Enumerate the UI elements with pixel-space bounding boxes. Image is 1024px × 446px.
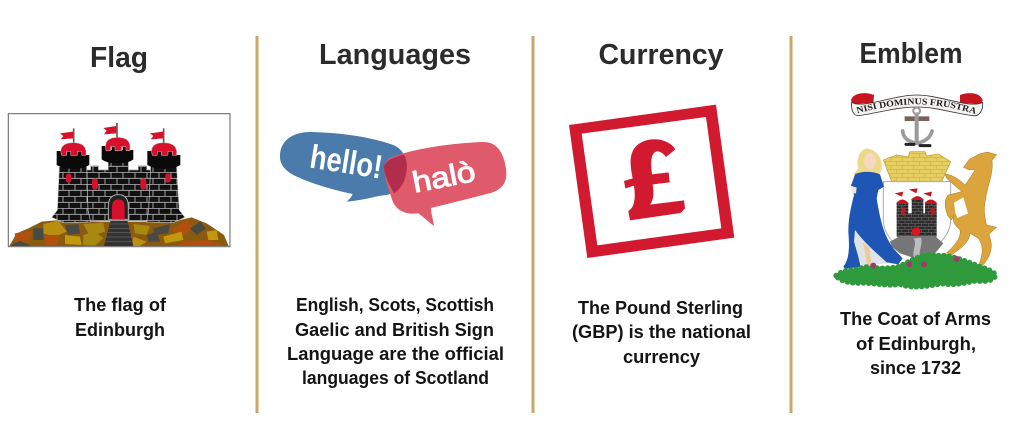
castle stairs bbox=[104, 220, 133, 246]
blue bubble: hello: hello! bbox=[307, 139, 385, 187]
heading: Flag: Flag bbox=[90, 42, 148, 74]
left tower bbox=[52, 167, 91, 223]
languages caption: Gaelic and British Sign bbox=[295, 319, 494, 340]
currency caption bbox=[572, 297, 751, 367]
rocky hill bbox=[9, 217, 229, 246]
flag caption bbox=[74, 294, 167, 340]
emblem caption: of Edinburgh, bbox=[856, 333, 976, 354]
red bubble: halo bbox=[384, 142, 506, 226]
divider: currency and emblem bbox=[790, 36, 792, 413]
coat of arms bbox=[833, 93, 998, 290]
emblem caption bbox=[840, 308, 991, 378]
panel: currency bbox=[569, 39, 751, 367]
heading: Emblem: Emblem bbox=[860, 38, 962, 70]
divider: flag and languages bbox=[256, 36, 258, 413]
currency caption: (GBP) is the national bbox=[572, 321, 751, 342]
grassy compartment bbox=[836, 255, 996, 287]
castle walls bbox=[86, 160, 151, 221]
heading: Languages: Languages bbox=[319, 39, 471, 71]
speech bubbles bbox=[280, 132, 506, 226]
flags bbox=[74, 123, 164, 143]
mural crown bbox=[883, 152, 951, 182]
currency caption: The Pound Sterling bbox=[578, 297, 743, 318]
panel: languages bbox=[280, 39, 506, 388]
anchor bbox=[903, 108, 932, 146]
emblem caption: The Coat of Arms bbox=[840, 308, 991, 329]
icon: pound sterling stamp bbox=[569, 105, 734, 258]
panel: flag bbox=[8, 42, 230, 340]
centre tower bbox=[102, 146, 133, 163]
languages caption: languages of Scotland bbox=[302, 367, 489, 388]
flag caption: Edinburgh bbox=[75, 319, 165, 340]
heading: Currency: Currency bbox=[598, 39, 724, 71]
shield bbox=[883, 182, 951, 260]
languages caption bbox=[287, 294, 504, 388]
flag of Edinburgh bbox=[8, 114, 230, 247]
panel: emblem bbox=[833, 38, 998, 378]
emblem caption: since 1732 bbox=[870, 357, 961, 378]
castle door bbox=[108, 195, 128, 219]
right tower bbox=[147, 167, 185, 223]
doe supporter bbox=[945, 152, 997, 271]
bubble overlap bbox=[384, 154, 407, 193]
maiden figure bbox=[843, 148, 903, 269]
pound glyph bbox=[624, 139, 685, 220]
languages caption: English, Scots, Scottish bbox=[296, 294, 494, 315]
currency caption: currency bbox=[623, 346, 701, 367]
blue bubble: hello bbox=[280, 132, 407, 202]
languages caption: Language are the official bbox=[287, 343, 504, 364]
flag caption: The flag of bbox=[74, 294, 167, 315]
red bubble: halo: halò bbox=[410, 155, 478, 200]
motto scroll: NISI DOMINUS FRUSTRA bbox=[856, 98, 976, 114]
divider: languages and currency bbox=[532, 36, 534, 413]
